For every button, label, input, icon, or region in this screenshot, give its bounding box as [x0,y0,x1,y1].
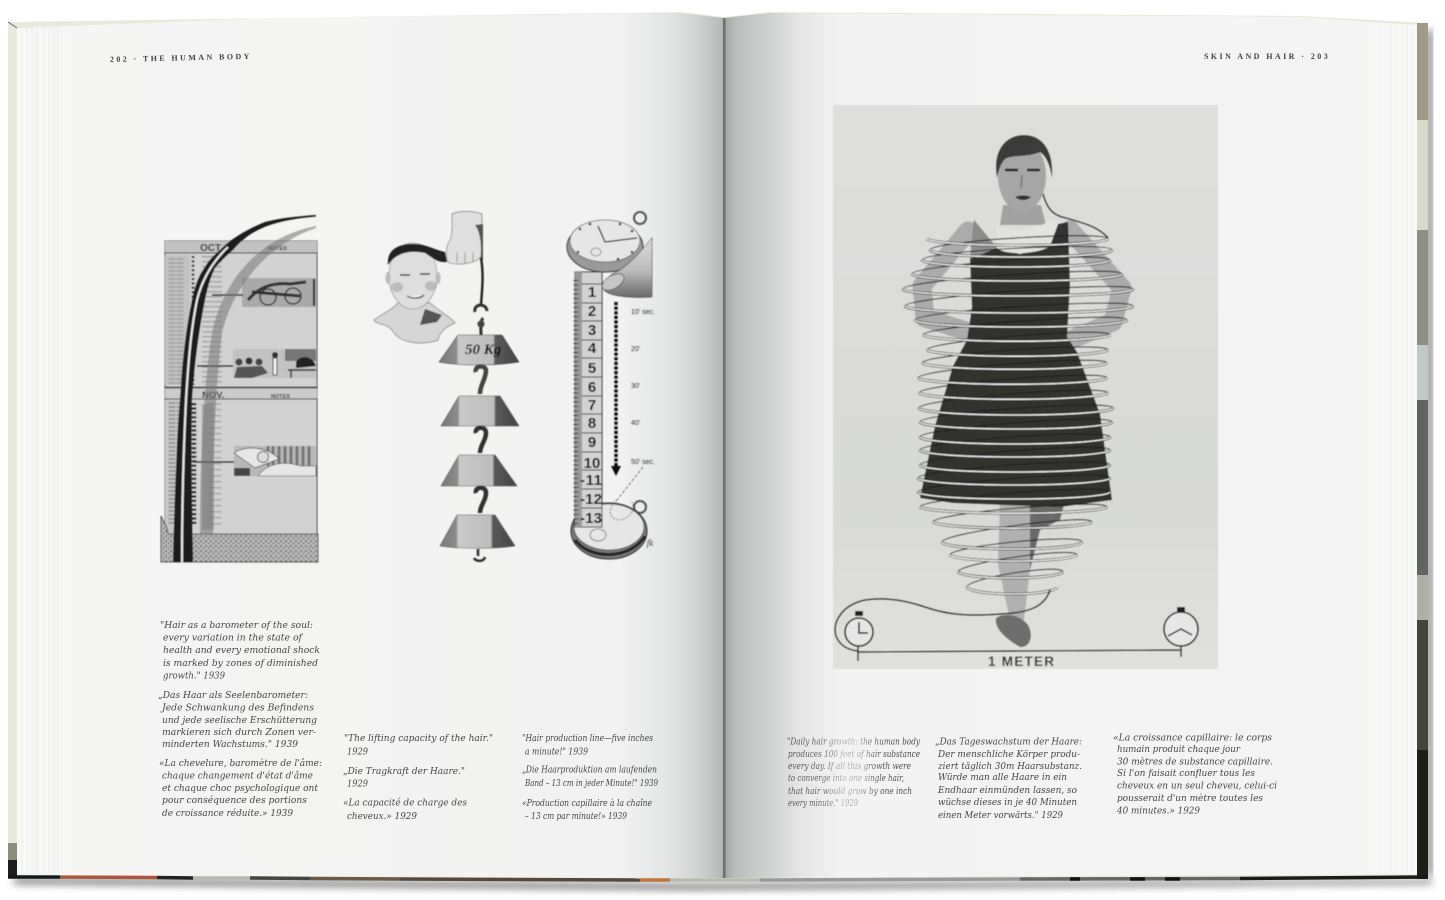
caption: hair production line [522,733,658,822]
measuring tape: -12 [580,491,602,508]
panel: left page [17,13,724,878]
gutter fold [723,18,726,878]
caption: daily hair growth, French: cheveux en un seul cheveu, celui-ci [1117,781,1277,792]
stopwatch: start [845,611,873,646]
arms [922,230,1122,340]
second hair: faded [200,226,316,534]
caption: hair as a barometer, French: «La chevelure, baromètre de l'âme: [159,758,322,769]
caption: daily hair growth, German: Endhaar einmünden lassen, so [937,785,1077,796]
caption: daily hair growth, French: 40 minutes.» 1929 [1116,806,1200,817]
caption: daily hair growth, French: 30 mètres de substance capillaire. [1117,757,1273,768]
caption: daily hair growth, German: Würde man alle Haare in ein [938,772,1067,783]
neck and collar [997,205,1058,253]
arrow: cyclist [212,294,243,296]
measuring tape: 5 [588,360,596,377]
time labels: 20' [631,346,640,353]
caption: lifting capacity: «La capacité de charge des [343,798,467,808]
caption: hair as a barometer, English [160,620,320,682]
caption: hair production line: Band – 13 cm in jeder Minute!" 1939 [524,778,658,789]
time labels: 40' [631,420,640,427]
caption: daily hair growth, German: Der menschliche Körper produ- [937,749,1080,760]
caption: hair as a barometer, German: Jede Schwankung des Befindens [160,702,314,714]
illustration: hair calendar barometer: NOTES [268,246,287,252]
skin layer [161,516,318,562]
caption: hair as a barometer, French: pour conséquence des portions [162,795,307,806]
measuring tape: 8 [588,415,596,432]
caption: daily hair growth, German: einen Meter vorwärts." 1929 [938,810,1063,821]
photograph: one meter of hair [833,105,1218,669]
caption: daily hair growth, English: every minute." 1929 [788,798,858,809]
illustration: hair production line [567,212,655,559]
bottom pocket watch [571,467,654,559]
measure line [858,641,1181,661]
caption: hair as a barometer, English: growth." 1939 [163,670,225,682]
hook and weight 4 [440,488,515,561]
caption: lifting capacity: "The lifting capacity of the hair." [344,733,493,744]
hair strand from head [1043,194,1108,238]
time labels [631,309,655,466]
hair spiral: back arcs [903,236,1133,587]
page stack lines: left [22,26,58,875]
caption: lifting capacity: cheveux.» 1929 [347,811,417,822]
caption: daily hair growth, German: ziert täglich 30m Haarsubstanz. [937,761,1082,772]
measuring tape: 1 [588,284,596,301]
hook and weight 2 [441,366,519,426]
cover edge: right photo strip [1417,23,1428,879]
illustration: hair calendar barometer [161,215,318,562]
caption: hair production line: "Hair production line—five inches [522,733,653,744]
caption: daily hair growth, English: that hair would grow by one inch [788,786,912,797]
caption: hair as a barometer, English: "Hair as a barometer of the soul: [160,620,313,631]
hand gripping hair [446,211,483,264]
measuring tape: -13 [580,510,602,527]
man's portrait [374,243,455,343]
caption: daily hair growth, English [787,737,920,809]
dress hem and left lapel [970,220,997,259]
caption: daily hair growth, German: wüchse dieses in je 40 Minuten [938,797,1077,808]
hair strand to stopwatch [835,590,1050,651]
caption: hair as a barometer, French: de croissance réduite.» 1939 [162,808,293,819]
arrow: bed [194,461,234,463]
caption: daily hair growth, French [1113,732,1277,817]
caption: hair as a barometer, German: minderten Wachstums." 1939 [162,739,298,750]
caption: hair production line: „Die Haarproduktion am laufenden [522,764,657,776]
caption: hair as a barometer, English: health and every emotional shock [163,645,320,656]
caption: daily hair growth, English: to converge into one single hair, [788,773,904,784]
caption: hair as a barometer, English: is marked by zones of diminished [163,658,318,669]
caption: lifting capacity: „Die Tragkraft der Haare." [343,766,465,777]
top pocket watch [567,212,646,272]
head [996,135,1052,212]
caption: hair as a barometer, French [159,758,322,819]
caption: hair as a barometer, English: every variation in the state of [163,632,304,644]
measuring tape: -11 [580,472,602,489]
panel: right page [724,13,1417,878]
caption: 1 meter: 1 METER [988,654,1054,669]
caption: hair as a barometer, German [158,690,317,750]
measuring tape: 4 [588,340,597,357]
caption: hair production line: a minute!" 1939 [525,746,588,758]
arrow: classroom [197,365,233,367]
illustration: hair calendar barometer: OCT. [200,243,223,254]
caption: daily hair growth, German [935,737,1082,821]
measuring tape: 10 [584,455,600,472]
caption: daily hair growth, French: pousserait d'un mètre toutes les [1117,793,1263,804]
caption: daily hair growth, French: «La croissance capillaire: le corps [1113,732,1272,743]
illustration: hair calendar barometer: NOTES [271,394,290,400]
caption: daily hair growth, English: every day. If all this growth were [788,761,911,772]
page stack lines: right [1380,22,1412,874]
main hair [173,215,316,562]
vignette: cyclist [242,278,316,307]
illustration: lifting capacity of hair [374,211,519,561]
caption: daily hair growth, English: "Daily hair growth: the human body [787,737,920,748]
illustration: hair calendar barometer: NOV. [202,390,224,401]
hair spiral: front arcs highlight [903,239,1133,594]
hair strand and hook [481,258,483,305]
caption: lifting capacity: 1929 [347,746,368,758]
vignette: bed [234,446,316,476]
caption: hair as a barometer, German: und jede seelische Erschütterung [162,715,317,726]
measuring tape: 9 [588,434,596,451]
bottom pocket watch: fk [647,538,654,548]
cover edge: bottom strip [8,877,1428,880]
vignette: classroom [233,349,316,378]
hair spiral: front arcs outline [903,239,1133,594]
caption: daily hair growth, French: Si l'on faisait confluer tous les [1117,768,1255,779]
caption: hair production line: – 13 cm par minute!» 1939 [525,811,627,822]
caption: hair as a barometer, German: markieren sich durch Zonen ver- [162,727,316,738]
hook and weight 3 [441,428,517,486]
caption: hair as a barometer, French: chaque changement d'état d'âme [162,770,313,782]
thumb [599,238,652,297]
hook and weight 1 [439,305,519,365]
stopwatch: end [1164,607,1198,646]
caption: hair production line: «Production capillaire à la chaîne [522,798,652,809]
measuring tape: 7 [588,397,596,414]
hook and weight 1: 50 Kg [465,342,502,358]
time labels: 10' sec. [631,309,655,316]
caption: lifting capacity [343,733,493,822]
measuring tape [575,272,602,527]
caption: hair as a barometer, German: „Das Haar als Seelenbarometer: [158,690,308,701]
cover edge: bottom left corner [8,843,17,878]
time labels: 50' sec. [631,459,655,466]
time labels: 30' [631,383,640,390]
caption: daily hair growth, English: produces 100 feet of hair substance [788,749,920,760]
caption: lifting capacity: 1929 [347,778,368,790]
caption: daily hair growth, German: „Das Tageswachstum der Haare: [935,737,1082,748]
measuring tape: 2 [588,303,596,320]
running head: left: 202 · THE HUMAN BODY [110,52,251,64]
measuring tape: 3 [588,322,596,339]
legs [996,500,1064,647]
caption: hair as a barometer, French: et chaque choc psychologique ont [162,783,318,794]
measuring tape: 6 [588,379,596,396]
dress [920,220,1112,507]
running head: right: SKIN AND HAIR · 203 [1204,52,1329,61]
dashed arrow [611,302,621,476]
caption: daily hair growth, French: humain produit chaque jour [1117,744,1241,755]
